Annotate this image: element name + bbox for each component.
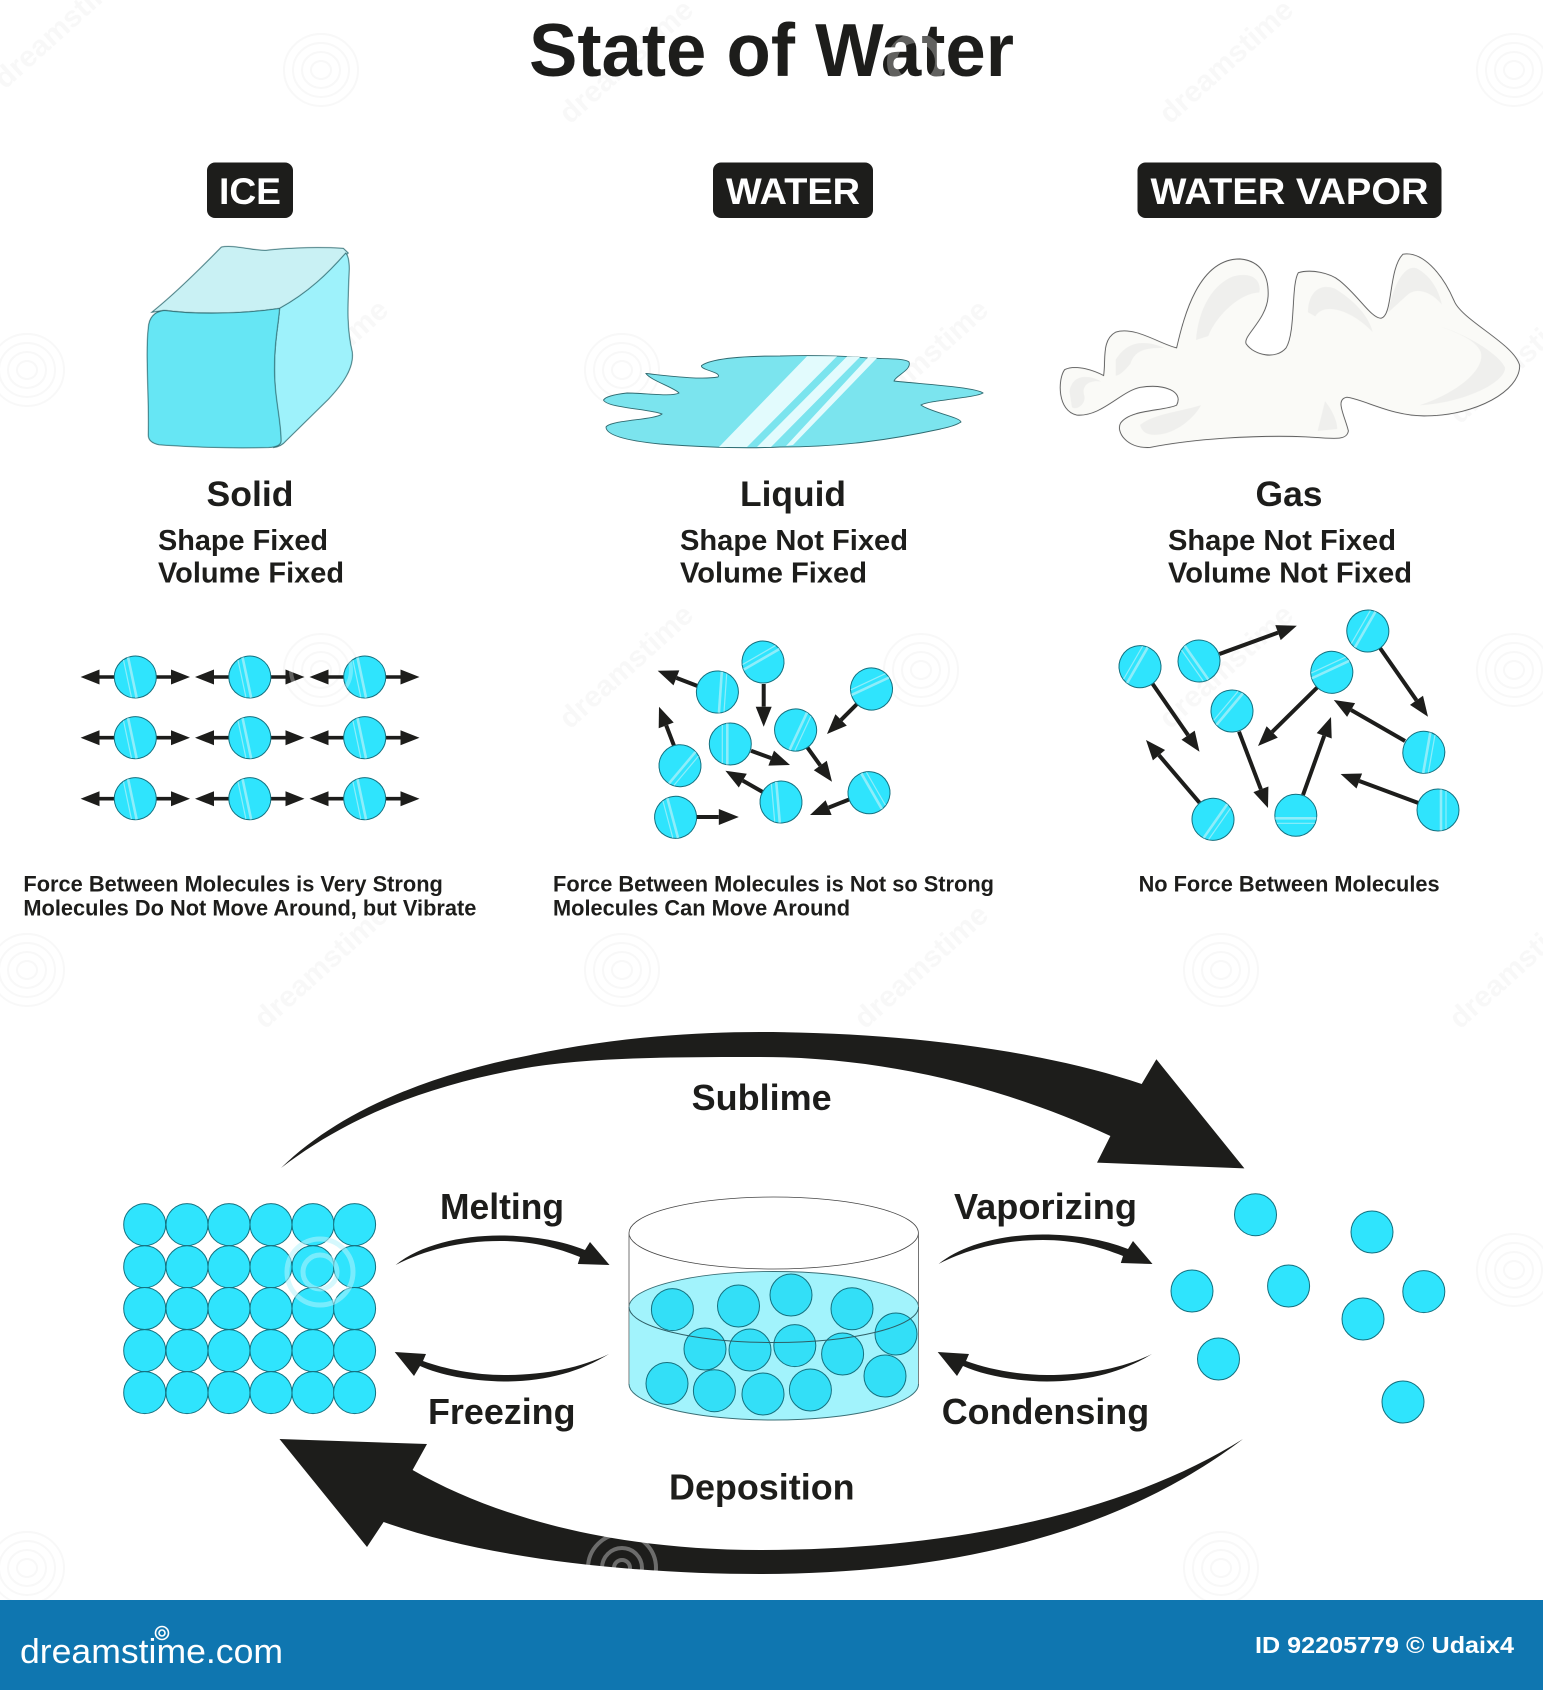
arrow: deposition [280, 1439, 1243, 1574]
label: Melting: Melting [440, 1186, 564, 1227]
icon: ice cube [147, 246, 352, 448]
label: Liquid: Liquid [740, 475, 846, 514]
title: State of Water [529, 8, 1014, 92]
text: solid force description [23, 872, 476, 921]
text: gas properties [1168, 525, 1412, 590]
liquid cylinder with particles [629, 1197, 918, 1420]
heading: WATER [713, 162, 873, 218]
text: gas force description: No Force Between Molecules [1139, 872, 1440, 897]
text: gas properties: Shape Not Fixed [1168, 525, 1396, 557]
arrow: melting [396, 1236, 610, 1265]
arrow: freezing [395, 1352, 609, 1382]
label: Gas: Gas [1256, 475, 1322, 514]
diagram: gas molecules moving [1111, 602, 1459, 849]
text: liquid properties [680, 525, 908, 590]
arrow: vaporizing [939, 1234, 1152, 1264]
label: Deposition: Deposition [669, 1466, 855, 1507]
diagram: liquid molecules moving [650, 633, 899, 843]
gas particles [1171, 1194, 1445, 1423]
footer bar: ID 92205779 © Udaix4 [1255, 1632, 1514, 1658]
watermark text: dreamstime [1153, 598, 1300, 735]
watermark overlays on dark shapes [291, 38, 940, 1602]
text: liquid properties: Volume Fixed [680, 558, 867, 590]
text: liquid properties: Shape Not Fixed [680, 525, 908, 557]
text: gas properties: Volume Not Fixed [1168, 558, 1412, 590]
text: solid properties [158, 525, 344, 590]
footer bar [0, 1600, 1543, 1690]
label: Sublime: Sublime [692, 1077, 832, 1118]
text: solid properties: Shape Fixed [158, 525, 328, 557]
label: Freezing: Freezing [428, 1391, 576, 1432]
text: solid force description: Molecules Do Not Move Around, but Vibrate [23, 896, 476, 921]
watermark text: dreamstime [248, 293, 395, 430]
watermark text: dreamstime [848, 898, 995, 1035]
arrow: sublime [281, 1032, 1244, 1168]
footer bar: dreamstime.com [20, 1633, 283, 1671]
diagram: solid molecules vibrating [81, 652, 419, 824]
watermark text [0, 0, 1543, 1035]
heading: WATER: WATER [726, 171, 860, 212]
watermark text: dreamstime [848, 293, 995, 430]
text: liquid force description: Force Between Molecules is Not so Strong [553, 872, 994, 897]
label: Vaporizing: Vaporizing [954, 1186, 1137, 1227]
arrow: condensing [938, 1352, 1152, 1382]
heading: WATER VAPOR [1138, 162, 1442, 218]
watermark text: dreamstime [248, 898, 395, 1035]
label: Solid: Solid [206, 475, 294, 514]
text: solid properties: Volume Fixed [158, 558, 344, 590]
watermark text: dreamstime [553, 598, 700, 735]
heading: ICE: ICE [219, 171, 281, 212]
heading: ICE [207, 162, 293, 218]
icon: vapor cloud [1060, 254, 1520, 448]
text: solid force description: Force Between Molecules is Very Strong [23, 872, 443, 897]
solid particle grid [124, 1204, 376, 1414]
heading: WATER VAPOR: WATER VAPOR [1150, 171, 1428, 212]
text: liquid force description [553, 872, 994, 921]
text: liquid force description: Molecules Can Move Around [553, 896, 850, 921]
icon: water puddle [604, 356, 983, 448]
label: Condensing: Condensing [942, 1391, 1149, 1432]
